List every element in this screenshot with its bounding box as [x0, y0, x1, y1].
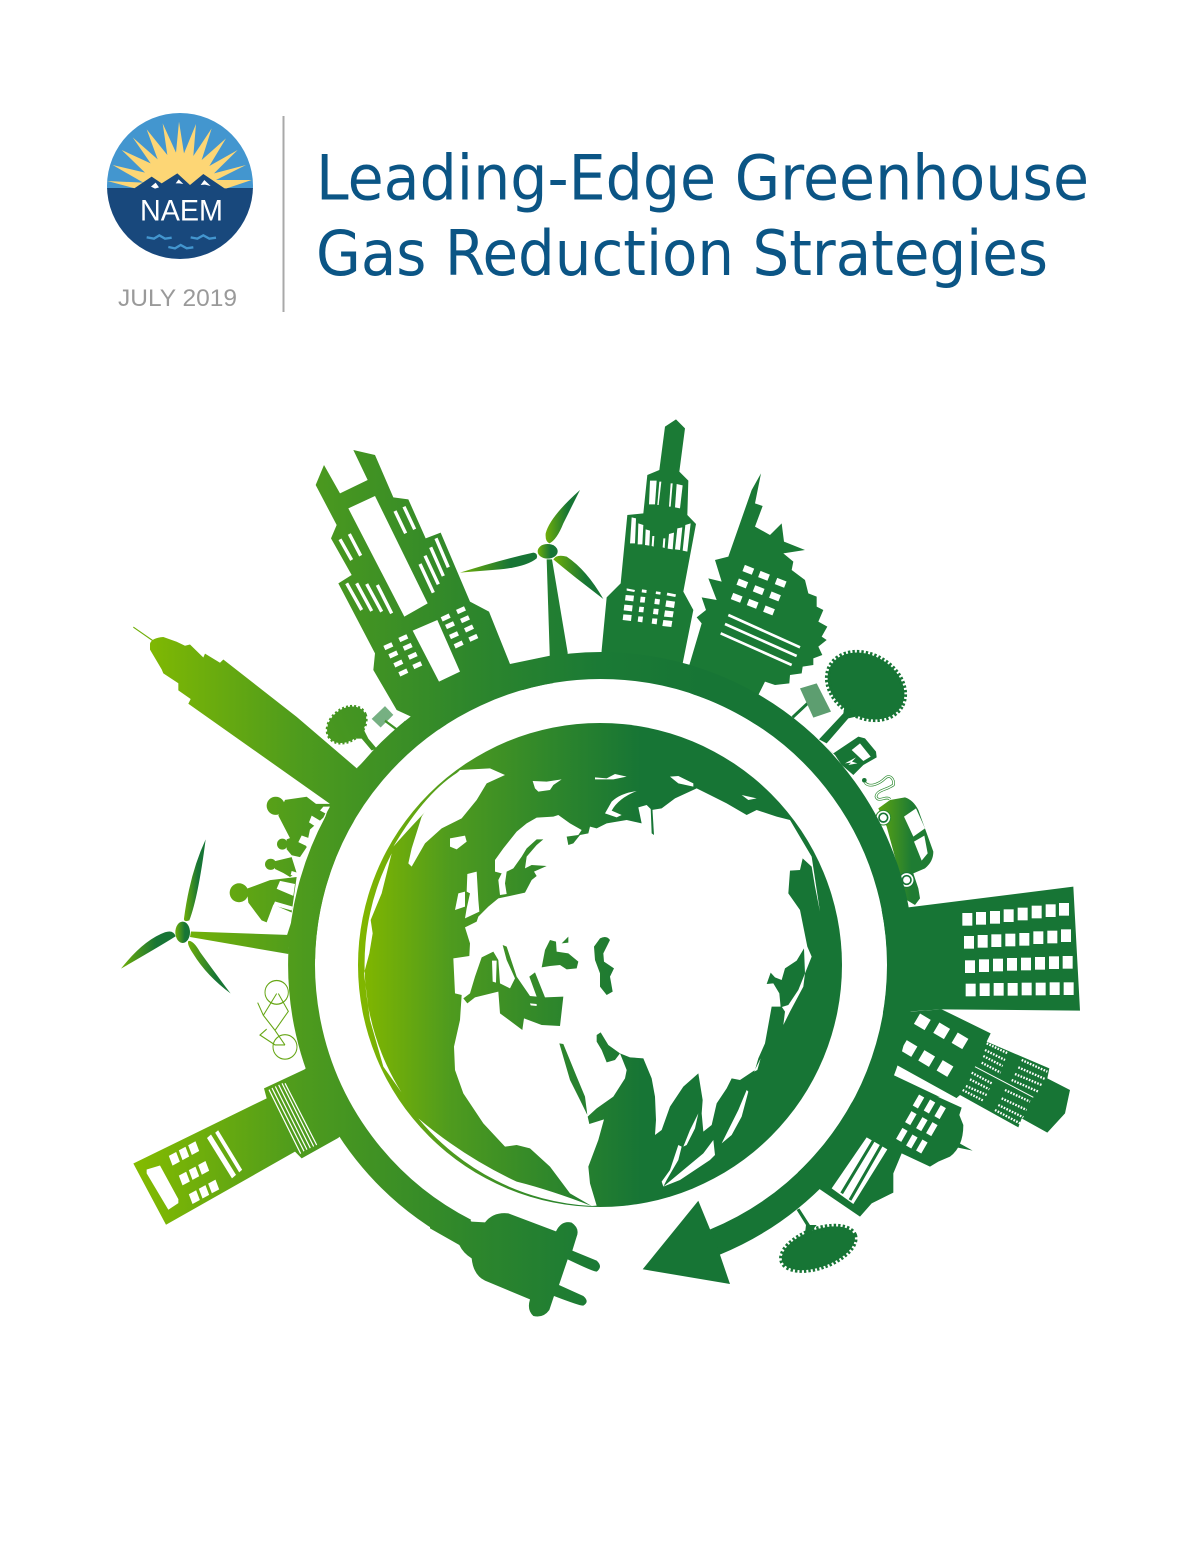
logo: NAEM	[107, 113, 253, 259]
date: JULY 2019	[118, 285, 237, 312]
right upper details	[793, 639, 933, 905]
icon: arrow head	[643, 1201, 730, 1284]
skyscraper: tall tilted tower	[133, 627, 377, 826]
left side of city	[121, 627, 417, 1225]
people with children	[230, 786, 363, 960]
divider	[282, 116, 284, 312]
icon: tree	[815, 639, 917, 743]
icon: charging station	[825, 737, 877, 775]
icon: solar panel	[793, 683, 831, 718]
ring with plug and arrow	[302, 666, 901, 1317]
icon: bicycle	[258, 981, 297, 1059]
icon: plug	[430, 1197, 600, 1317]
globe	[358, 723, 842, 1207]
icon: electric car	[876, 797, 933, 905]
wind turbine: left	[121, 839, 290, 994]
skyscraper: spiky building	[677, 473, 827, 727]
title	[316, 142, 1089, 290]
white gap inside ring	[315, 679, 887, 1251]
icon: charging cable	[862, 777, 894, 799]
title: Gas Reduction Strategies	[316, 217, 1048, 290]
building: tilted twin tower	[316, 450, 603, 730]
page cover	[107, 113, 1086, 1316]
ground between tower and building	[357, 721, 417, 786]
building: block with square windows	[880, 887, 1080, 1013]
building: office with tiny windows	[873, 1009, 1070, 1133]
icon: lower tree	[776, 1208, 861, 1279]
upper right of city	[600, 419, 827, 727]
seas	[463, 807, 805, 1115]
building: lower left	[133, 1055, 350, 1225]
icon: small solar panel	[372, 706, 398, 731]
illustration: green city around globe	[121, 419, 1080, 1317]
icon: small tree	[322, 699, 377, 750]
logo wordmark: NAEM	[140, 194, 223, 228]
lower right of city	[776, 887, 1080, 1279]
continents	[364, 768, 820, 1206]
wind turbine: top	[460, 490, 603, 663]
building: domed tower	[790, 1077, 973, 1217]
title: Leading-Edge Greenhouse	[316, 142, 1089, 214]
skyscraper: stepped tower	[600, 419, 702, 677]
